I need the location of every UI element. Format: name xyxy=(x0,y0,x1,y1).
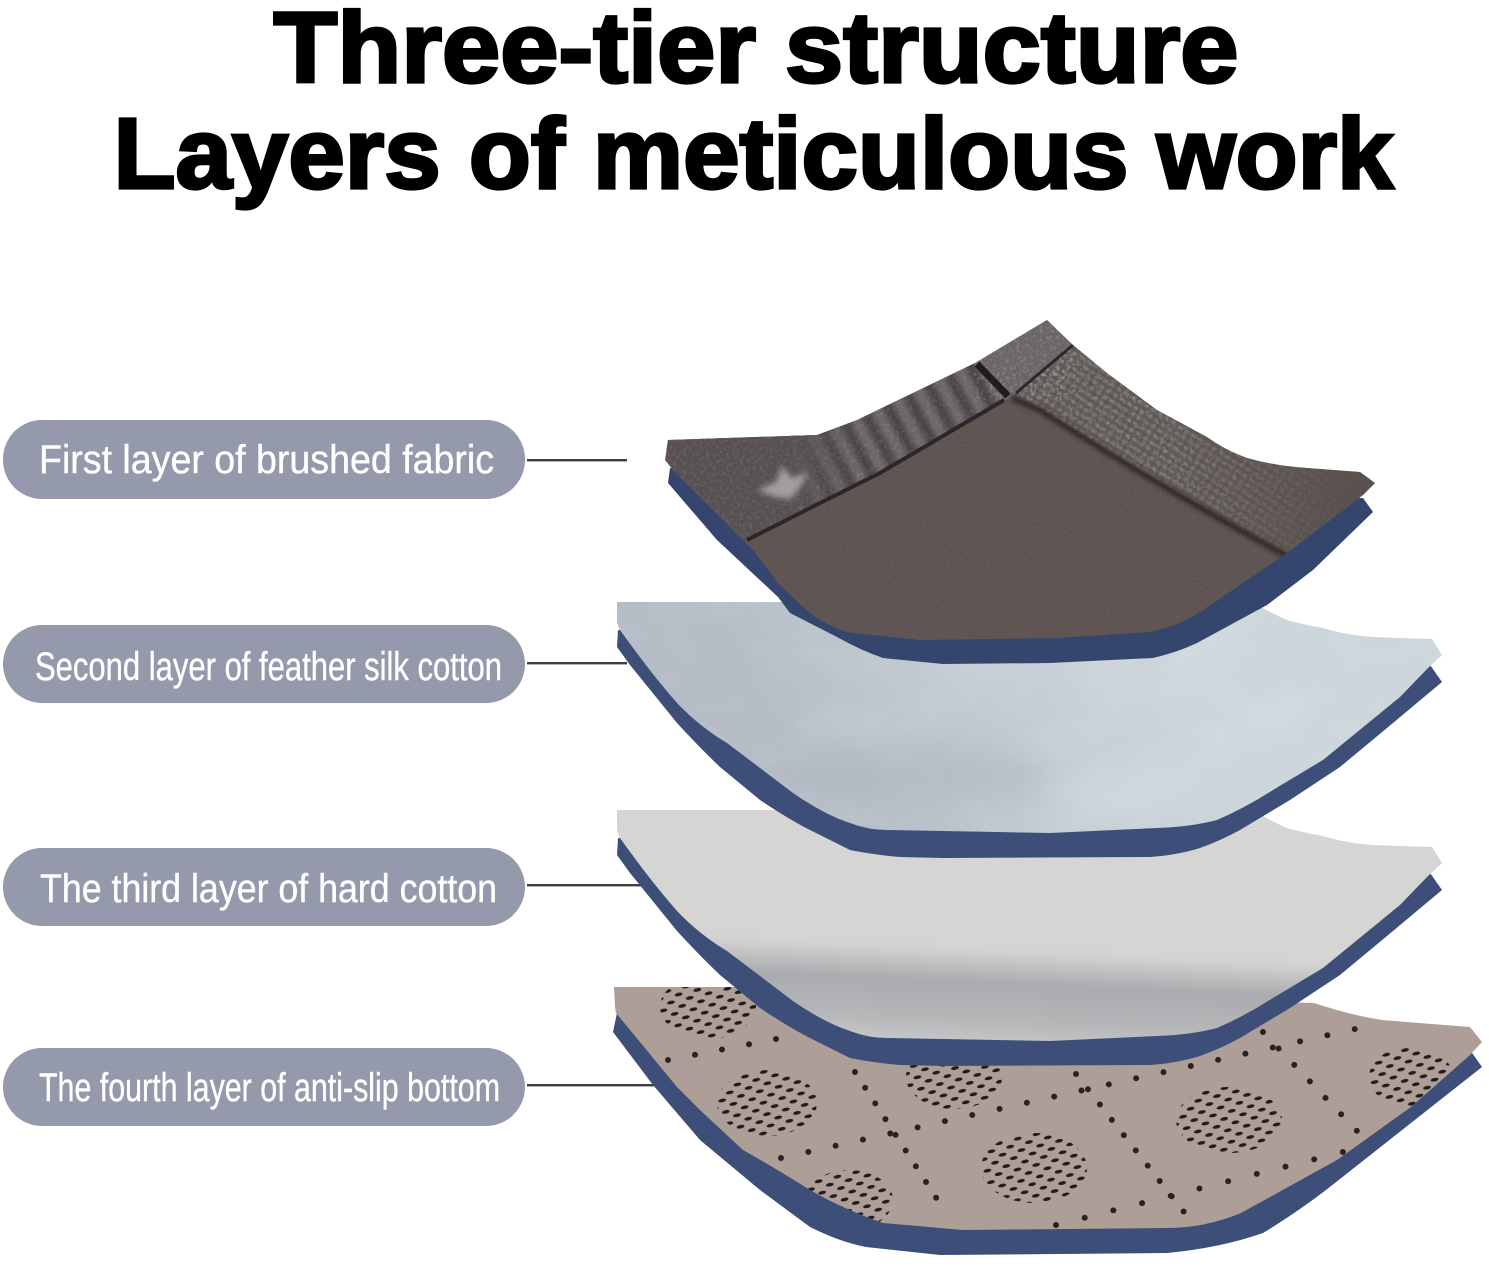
top piece xyxy=(975,320,1073,400)
brushed highlight xyxy=(757,466,808,499)
title: Layers of meticulous work xyxy=(114,98,1394,210)
soft shading xyxy=(914,758,1134,808)
layer 3: hard cotton xyxy=(617,810,1442,1066)
soft seam shadows xyxy=(1012,398,1287,556)
layer 4: anti-slip bottom xyxy=(613,975,1482,1255)
dot pattern xyxy=(660,975,1453,1230)
layer 2: feather silk cotton xyxy=(610,595,1450,858)
label: third layer xyxy=(3,848,642,926)
ribbed strip xyxy=(666,363,1002,537)
label: second layer: Second layer of feather silk cotton xyxy=(35,645,502,689)
layer 1: brushed fabric xyxy=(660,318,1380,664)
label: first layer: First layer of brushed fabric xyxy=(39,438,494,482)
label: fourth layer xyxy=(3,1048,659,1126)
title xyxy=(114,0,1394,210)
label: third layer: The third layer of hard cotton xyxy=(40,867,497,911)
label: fourth layer: The fourth layer of anti-slip bottom xyxy=(39,1066,500,1110)
label: first layer xyxy=(3,420,627,499)
label: second layer xyxy=(3,625,627,703)
woven strip xyxy=(1010,340,1380,560)
